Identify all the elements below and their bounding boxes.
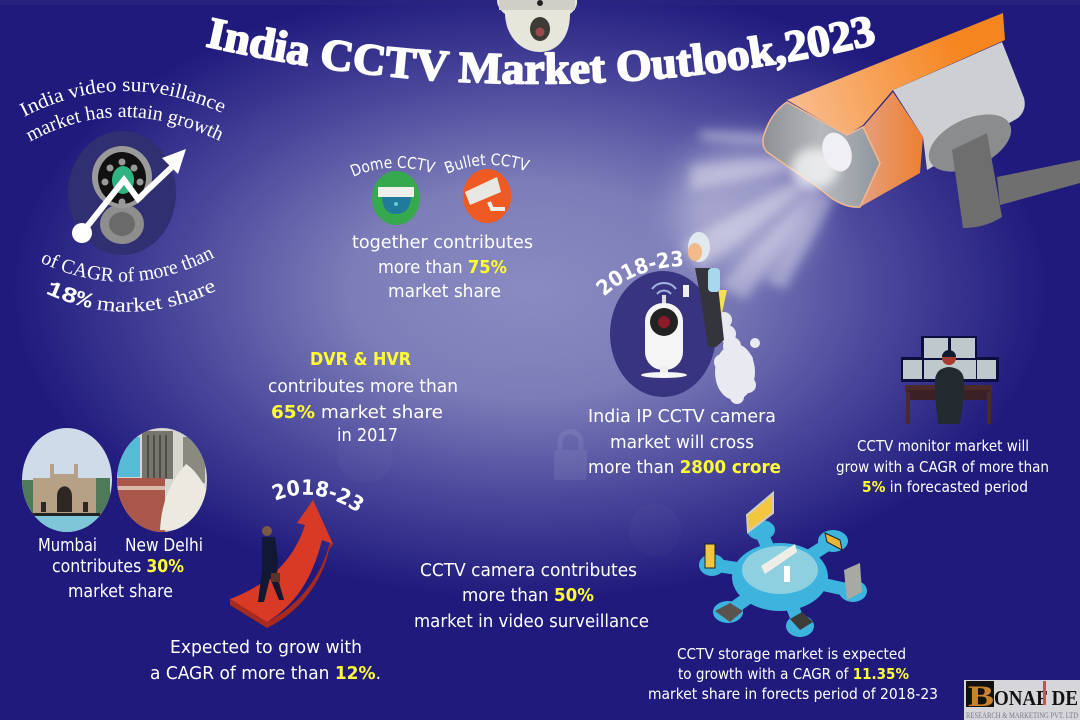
icon: businessman [258, 526, 284, 602]
text block: DVR and HVR: 65% market share [271, 402, 440, 423]
caption: Expected to grow with [170, 637, 362, 658]
icon: Gateway of India [22, 428, 112, 532]
text block: CCTV camera share: market in video surveillance [414, 611, 649, 632]
icon: security operator [901, 336, 999, 424]
panel: growth arrow [150, 479, 381, 684]
panel: IP CCTV camera [588, 232, 789, 478]
caption: CCTV storage market is expected [677, 645, 906, 663]
panel: CCTV monitor [836, 336, 1049, 496]
caption: more than 75% [378, 257, 511, 278]
faint lock icon [554, 432, 587, 480]
caption: market will cross [610, 432, 754, 453]
caption: CCTV monitor market will [857, 437, 1029, 455]
icon: IP camera on circle [610, 271, 716, 397]
light beams from camera [675, 130, 835, 300]
panel: city share [20, 426, 210, 602]
labels: contributes 30% [52, 556, 189, 577]
text block: CCTV camera share: more than 50% [462, 585, 597, 606]
text block: DVR and HVR: contributes more than [268, 376, 458, 397]
logo [964, 680, 1080, 720]
caption: a CAGR of more than 12%. [150, 663, 381, 684]
caption: grow with a CAGR of more than [836, 458, 1049, 476]
caption: market share [388, 281, 501, 302]
curved caption bottom: of CAGR of more than [42, 250, 215, 282]
labels: Mumbai [38, 535, 97, 556]
caption: to growth with a CAGR of 11.35% [678, 665, 917, 683]
icon: red arrow [230, 500, 333, 628]
caption: market share in forects period of 2018-23 [648, 685, 938, 703]
icon: storage network [699, 493, 867, 637]
icon: smoke cloud [714, 312, 760, 404]
icon: dome camera top [497, 0, 577, 52]
panel: dome and bullet CCTV [350, 153, 533, 302]
curved caption top: India video surveillance market has attain growth [18, 80, 224, 142]
icon: jetpack man [683, 232, 727, 347]
curved date: 2018-23 [596, 250, 682, 296]
curved labels: Dome CCTVBullet CCTV [350, 153, 530, 176]
text block: CCTV camera share: CCTV camera contributes [420, 560, 637, 581]
icon: New Delhi buildings [117, 428, 207, 532]
icon: bullet camera [463, 169, 511, 223]
icon: large CCTV camera [763, 13, 1080, 228]
curved share: 18% market share [46, 282, 216, 312]
caption: together contributes [352, 232, 533, 253]
text block: DVR and HVR: DVR & HVR [310, 349, 411, 370]
text block: DVR and HVR: in 2017 [337, 425, 398, 446]
logo: B [968, 680, 994, 713]
panel: CCTV storage [648, 493, 938, 703]
curved date: 2018-23 [272, 479, 364, 511]
caption: India IP CCTV camera [588, 406, 776, 427]
icon: camera with growth arrow [68, 131, 186, 255]
panel: video surveillance growth [18, 80, 224, 312]
caption: 5% in forecasted period [862, 478, 1046, 496]
icon: dome camera [372, 171, 420, 225]
labels: market share [68, 581, 173, 602]
title: India CCTV Market Outlook,2023 [206, 16, 875, 85]
caption: more than 2800 crore [588, 457, 789, 478]
labels: New Delhi [125, 535, 203, 556]
